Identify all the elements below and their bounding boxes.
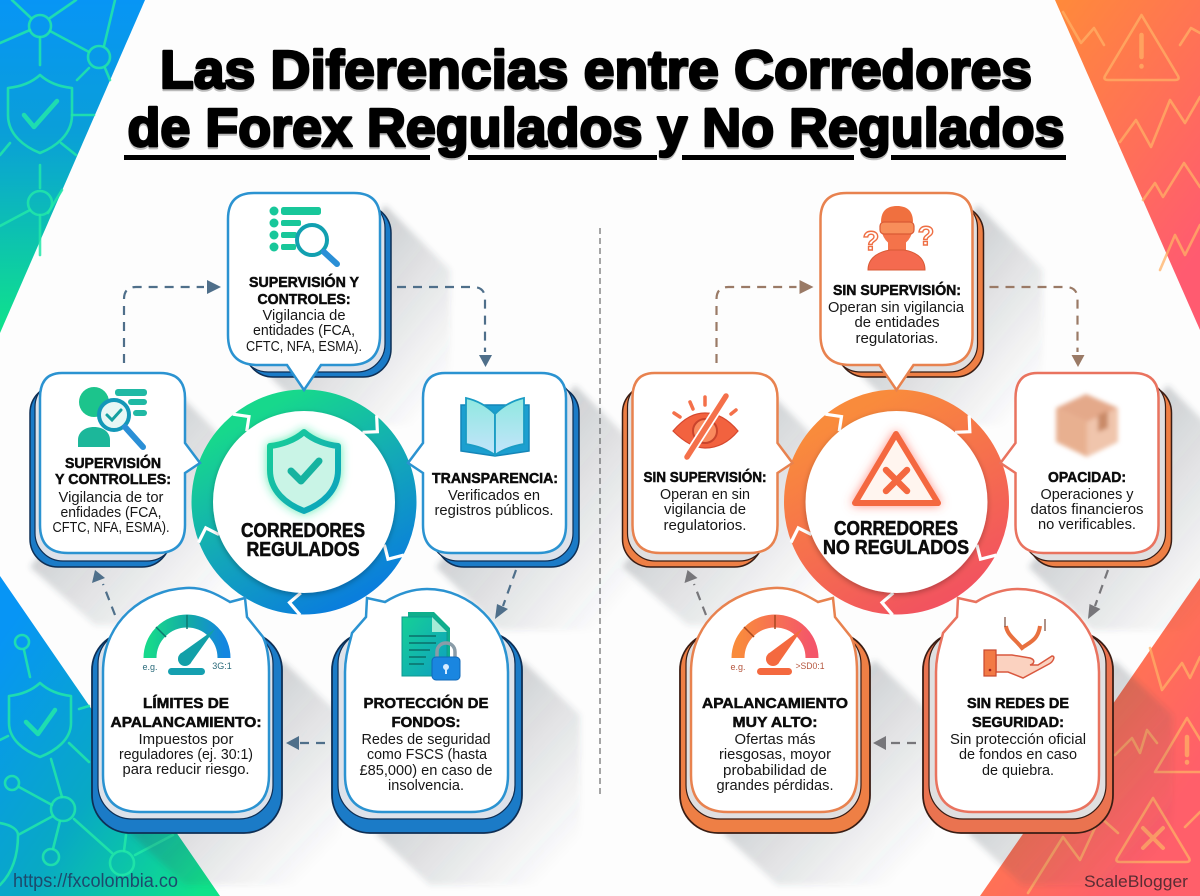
panel: apalancamiento muy alto: probabilidad de [723,763,827,779]
icon: blurred box [1056,394,1118,457]
title: Las Diferencias entre Corredores [160,40,1032,100]
arrows: regulated cycle [92,280,516,750]
icon: user under magnifier [78,387,147,447]
footer: source url: https://fxcolombia.co [13,871,178,892]
panel: opacidad: no verificables. [1038,517,1136,533]
panel: sin supervision (left): Operan en sin [660,487,750,503]
center: corredores no regulados [823,434,969,559]
panel: transparencia [408,373,579,567]
panel: apalancamiento muy alto: Ofertas más [734,732,816,748]
icon: blindfolded person: ? [863,226,879,256]
panel: supervision y controlles (left) [30,373,200,567]
center: corredores no regulados: CORREDORES [834,518,958,540]
icon: blindfolded person: ? [918,221,934,251]
hub: regulated ring [195,400,406,615]
panel: sin supervision (top right cluster): de entidades [854,315,940,331]
icon: list with magnifier [270,206,337,264]
panel: proteccion de fondos: insolvencia. [388,778,464,794]
panel: supervision y controles (top left cluster): Vigilancia de [262,308,346,324]
panel: transparencia: TRANSPARENCIA: [432,471,558,487]
title [124,40,1066,160]
panel: supervision y controles (top left cluster): CFTC, NFA, ESMA). [246,339,362,355]
panel: limites de apalancamiento: reguladores (ej. 30:1) [119,747,253,763]
background: bottom right corner with warning triangles [980,578,1200,896]
panel: limites de apalancamiento: APALANCAMIENTO: [110,715,262,731]
panel: limites de apalancamiento: para reducir riesgo. [122,762,250,778]
panel: apalancamiento muy alto: MUY ALTO: [732,715,818,731]
panel: sin redes de seguridad: de fondos en caso [959,747,1077,763]
panel: proteccion de fondos: como FSCS (hasta [367,747,488,763]
panel: sin supervision (left): SIN SUPERVISIÓN: [644,468,766,486]
panel: sin redes de seguridad: Sin protección oficial [950,732,1086,748]
panel: sin supervision (left): regulatorios. [664,518,746,534]
panel: sin redes de seguridad: SEGURIDAD: [972,715,1064,731]
title: de Forex Regulados y No Regulados [128,98,1064,158]
panel: opacidad [1000,373,1172,567]
icon: open book [461,398,529,456]
panel: sin supervision (top right cluster) [820,193,984,390]
panel: supervision y controles (top left cluster): SUPERVISIÓN Y [249,273,359,291]
panel: sin redes de seguridad: de quiebra. [982,763,1054,779]
panel: supervision y controles (top left cluster): entidades (FCA, [253,323,355,339]
panel: apalancamiento muy alto: APALANCAMIENTO [702,696,848,712]
panel: supervision y controlles (left): Vigilancia de tor [58,490,164,506]
icon: gauge [142,615,232,675]
hub: unregulated ring [787,400,998,615]
icon: document with padlock [402,612,460,680]
panel: proteccion de fondos: PROTECCIÓN DE [364,694,489,712]
panel: apalancamiento muy alto: riesgosas, moyor [719,747,831,763]
panel: proteccion de fondos: FONDOS: [392,715,460,731]
icon: gauge high: e.g. [730,662,746,672]
panel: sin redes de seguridad: SIN REDES DE [967,696,1069,712]
panel: transparencia: registros públicos. [434,503,554,519]
icon: gauge high [730,615,824,675]
panel: supervision y controlles (left): SUPERVISIÓN [65,454,161,472]
panel: proteccion de fondos: £85,000) en caso de [360,763,492,779]
footer: brand: ScaleBlogger [1084,872,1188,891]
panel: opacidad: datos financieros [1030,502,1144,518]
icon: shield with check [270,432,338,511]
background: bottom left corner with shield network [0,576,220,896]
panel: supervision y controlles (left): enfidades (FCA, [60,505,162,521]
panel: opacidad: OPACIDAD: [1048,470,1126,486]
panel: limites de apalancamiento: Impuestos por [138,732,234,748]
panel: apalancamiento muy alto [680,588,870,833]
center: corredores regulados [241,432,365,561]
panel: apalancamiento muy alto: grandes pérdidas. [716,778,834,794]
background: top left corner with shield network [0,0,145,333]
icon: blindfolded person [863,206,934,270]
panel: sin supervision (left): vigilancia de [664,502,746,518]
panel: sin redes de seguridad [923,589,1113,833]
panel: supervision y controles (top left cluster) [228,193,391,390]
center: corredores regulados: REGULADOS [246,539,360,561]
panel: sin supervision (left) [622,373,792,567]
panel: limites de apalancamiento [92,588,282,833]
panel: sin supervision (top right cluster): SIN SUPERVISIÓN: [833,281,961,299]
panel: transparencia: Verificados en [448,488,540,504]
background: top right corner with warning triangle [1055,0,1200,330]
icon: gauge high: >SD0:1 [796,661,824,671]
panel: proteccion de fondos: Redes de seguridad [362,732,490,748]
icon: warning triangle with x [855,434,938,503]
panel: proteccion de fondos [332,589,522,833]
panel: opacidad: Operaciones y [1040,487,1134,503]
center: corredores no regulados: NO REGULADOS [823,537,969,559]
panel: supervision y controlles (left): CFTC, NFA, ESMA). [52,520,170,536]
arrows: unregulated cycle [684,280,1108,750]
center divider [599,228,601,796]
center: corredores regulados: CORREDORES [241,520,365,542]
panel: limites de apalancamiento: LÍMITES DE [143,695,229,712]
panel: sin supervision (top right cluster): regulatorias. [856,331,938,347]
icon: gauge: 3G:1 [212,661,232,671]
icon: gauge: e.g. [142,662,158,672]
icon: hand and broken safety net [984,617,1054,678]
panel: sin supervision (top right cluster): Operan sin vigilancia [828,300,965,316]
panel: supervision y controles (top left cluster): CONTROLES: [258,292,350,308]
icon: crossed-out eye [673,396,738,457]
panel: supervision y controlles (left): Y CONTROLLES: [55,472,171,488]
